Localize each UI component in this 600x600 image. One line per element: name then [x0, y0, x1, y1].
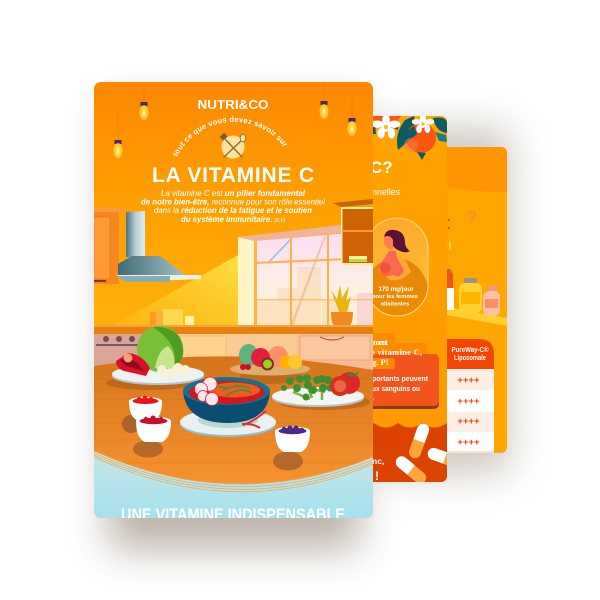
woman figure	[378, 230, 411, 280]
comparison table column: ++++	[457, 437, 480, 448]
icon: spoon and fork	[220, 133, 246, 158]
subheading fragment: nnelles	[372, 187, 400, 197]
intro text: La vitamine C est un pilier fondamental	[161, 189, 306, 198]
intro text: de notre bien-être, reconnue pour son rôle essentiel	[141, 198, 325, 206]
right wall cabinet	[333, 199, 374, 265]
counter with jars	[94, 309, 373, 334]
main stew bowl	[180, 377, 276, 437]
plate: broccoli and tomato	[272, 371, 370, 410]
drop shadow	[108, 105, 510, 550]
lower cabinets and stove	[94, 334, 373, 374]
comparison table column: PureWay-C®	[452, 345, 489, 354]
back card top band	[447, 147, 507, 192]
scalloped footer with pills	[373, 423, 447, 482]
arch: breastfeeding dose	[373, 218, 428, 316]
left wall cabinet	[94, 207, 129, 284]
wooden table	[94, 356, 373, 518]
bottom heading: UNE VITAMINE INDISPENSABLE	[121, 506, 345, 524]
comparison table column: Liposomale	[454, 353, 486, 362]
panel: middle card	[373, 116, 447, 482]
arch: breastfeeding dose: pour les femmes	[372, 294, 418, 300]
question mark: ?	[467, 209, 477, 226]
pendant bulbs	[114, 74, 356, 158]
comparison table column	[447, 339, 494, 453]
potted plant	[331, 285, 353, 327]
small bowl: raspberries	[133, 416, 171, 458]
intro text: dans la réduction de la fatigue et le soutien	[154, 206, 312, 215]
light beam	[112, 255, 238, 326]
infographic stack	[82, 80, 532, 576]
window with city view	[238, 225, 373, 327]
intro text: du système immunitaire. [D,F]	[181, 215, 286, 224]
heading fragment: C?	[370, 158, 393, 177]
panel: main card	[94, 82, 373, 518]
plate: cabbage, pepper and cauliflower	[106, 326, 204, 390]
radishes	[194, 377, 218, 406]
comparison table column: ++++	[457, 375, 480, 386]
callout: key fact: g. P!	[372, 357, 389, 367]
callout: key fact	[373, 333, 439, 409]
plate: mixed fruit	[230, 344, 310, 384]
callout: key fact: e vitamine C,	[371, 347, 422, 357]
arch: breastfeeding dose: 170 mg/jour	[378, 286, 414, 293]
logo: NUTRI&CO	[198, 98, 269, 112]
arc tagline: tout ce que vous devez savoir sur	[173, 116, 288, 156]
small bowl: red berries	[122, 396, 162, 433]
pale blue base with arcs	[94, 451, 373, 518]
comparison table column: ++++	[457, 416, 480, 427]
shelf with supplement bottles	[447, 269, 507, 326]
comparison table column: ++++	[457, 396, 480, 407]
cooker hood	[117, 211, 201, 282]
scalloped footer with pills: nc,	[372, 456, 384, 466]
intro text	[141, 189, 325, 224]
city skyline	[257, 267, 337, 327]
panel: back card	[447, 147, 507, 453]
callout: key fact: ux sanguins ou	[372, 384, 420, 393]
scalloped footer with pills: !	[375, 469, 379, 483]
callout: key fact: portants peuvent	[372, 374, 428, 383]
small bowl: blueberries	[273, 426, 310, 470]
exclamation marks	[448, 219, 451, 249]
arch: breastfeeding dose: allaitantes	[381, 302, 409, 308]
orange blossoms decoration	[373, 116, 447, 160]
title: LA VITAMINE C	[152, 164, 314, 187]
callout: key fact: .	[372, 393, 374, 402]
callout: key fact: ment	[373, 337, 388, 347]
